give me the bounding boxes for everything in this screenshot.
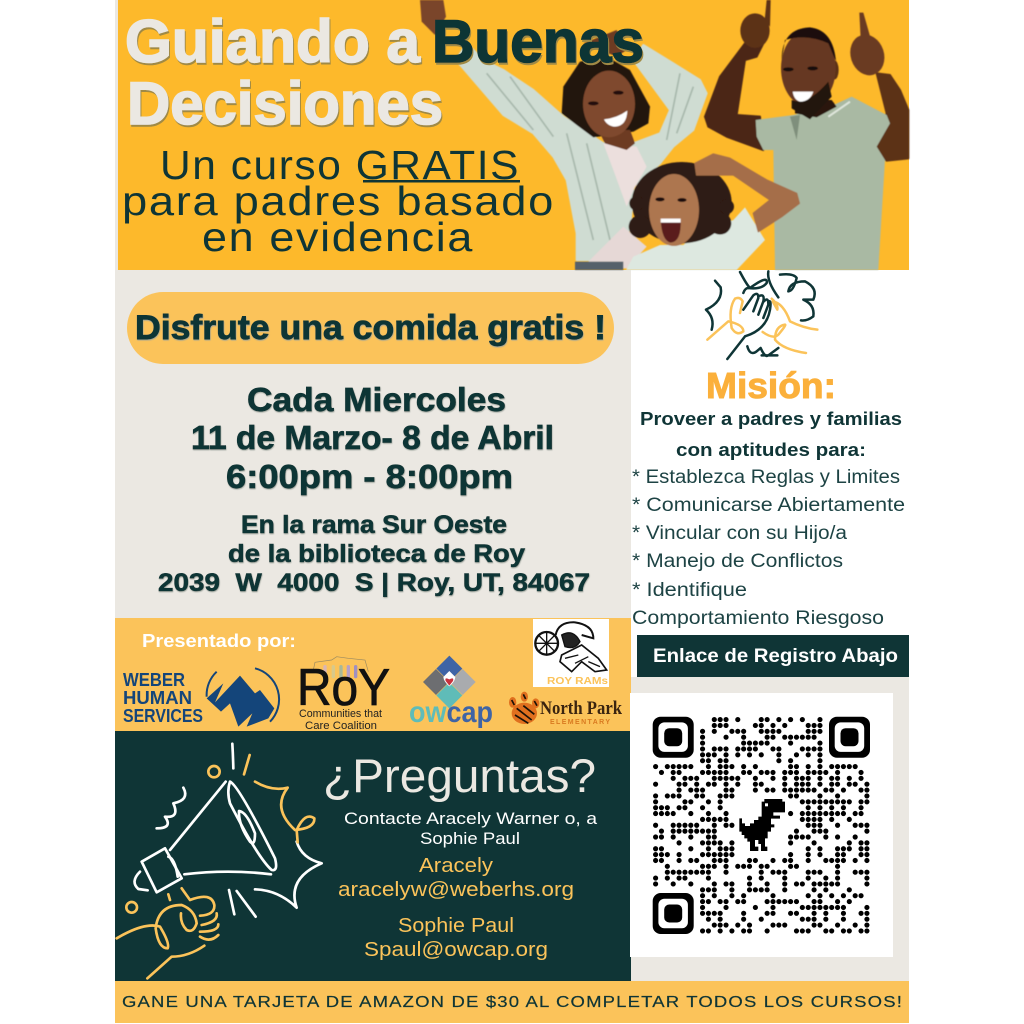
girl's raised arm (695, 154, 799, 232)
skills list: * Vincular con su Hijo/a (632, 523, 847, 544)
skills list (632, 467, 905, 629)
skills list: Comportamiento Riesgoso (632, 608, 884, 629)
text block: location: de la biblioteca de Roy (228, 540, 525, 568)
woman's raised hands (420, 0, 446, 35)
panel: mission (632, 271, 905, 629)
logo: Roy Communities that Care: RoY (297, 659, 390, 717)
logo: Roy Rams (533, 619, 609, 687)
banner: Amazon gift card: GANE UNA TARJETA DE AMAZON DE $30 AL COMPLETAR TODOS LOS CURSOS! (122, 994, 903, 1011)
text block: location: En la rama Sur Oeste (241, 511, 507, 539)
logo: Roy Communities that Care: Care Coalition (305, 720, 377, 732)
title: Guiando a (125, 8, 421, 75)
contact details: Aracely (419, 855, 493, 877)
icon: megaphone (117, 744, 322, 978)
icon: dinosaur (739, 799, 785, 851)
man's arms and hands (705, 40, 765, 150)
text block: location: 2039 W 4000 S | Roy, UT, 84067 (158, 569, 590, 597)
panel: event details background (115, 270, 631, 618)
icon: high five hands (706, 271, 817, 359)
heading: questions: ¿Preguntas? (323, 749, 596, 802)
man's shirt (756, 97, 890, 270)
QR data dots (656, 720, 867, 931)
banner: Amazon gift card (115, 981, 909, 1023)
logo: Weber Human Services (123, 668, 279, 727)
jeans (575, 262, 623, 270)
woman's top (603, 143, 647, 207)
logo: Roy Rams: ROY RAMs (547, 675, 608, 687)
photo: family celebrating (420, 0, 908, 270)
girl's curly hair (629, 162, 734, 243)
contact details (338, 855, 574, 961)
panel: header banner (115, 0, 909, 270)
heading: presented by: Presentado por: (142, 631, 296, 651)
QR finder patterns (653, 717, 870, 934)
contact details: Spaul@owcap.org (364, 939, 548, 961)
skills list: * Manejo de Conflictos (632, 551, 843, 572)
logo: Weber Human Services: SERVICES (123, 705, 203, 726)
text block: date and time: 11 de Marzo- 8 de Abril (191, 419, 554, 456)
logo: OWCAP: owcap (409, 696, 493, 729)
title (125, 8, 644, 137)
text block: date and time: Cada Miercoles (247, 381, 506, 418)
title: Buenas (432, 8, 644, 75)
heading: mission: Misión: (706, 365, 836, 406)
text block: date and time (191, 381, 554, 495)
logo: Roy Communities that Care: Communities that (299, 708, 382, 720)
logo: Weber Human Services: HUMAN (123, 687, 192, 708)
woman's cardigan (456, 43, 707, 260)
callout: free meal pill: Disfrute una comida gratis ! (135, 309, 606, 347)
woman's neck and face (598, 130, 635, 150)
callout: registration link: Enlace de Registro Abajo (653, 646, 898, 667)
contact details: Sophie Paul (398, 915, 514, 937)
mission statement (640, 408, 902, 460)
panel: questions (115, 731, 631, 981)
contact details: aracelyw@weberhs.org (338, 879, 574, 901)
mission statement: Proveer a padres y familias (640, 408, 902, 429)
logo: OWCAP (409, 656, 493, 729)
logo: North Park Elementary: North Park (540, 698, 622, 719)
mission statement: con aptitudes para: (676, 439, 866, 460)
logo: North Park Elementary (509, 692, 622, 726)
man's head (795, 100, 837, 117)
contact intro (344, 810, 598, 848)
subtitle: Un curso GRATIS (160, 142, 520, 188)
logo: North Park Elementary: ELEMENTARY (550, 719, 610, 726)
text block: date and time: 6:00pm - 8:00pm (226, 458, 513, 495)
callout: registration link (637, 635, 909, 677)
text block: location (158, 511, 590, 597)
skills list: * Establezca Reglas y Limites (632, 467, 900, 488)
panel: QR code (630, 677, 909, 981)
skills list: * Identifique (632, 580, 747, 601)
subtitle: en evidencia (202, 214, 474, 260)
callout: free meal pill (127, 292, 614, 364)
panel: sponsors (115, 618, 631, 732)
contact intro: Sophie Paul (420, 830, 520, 848)
subtitle: para padres basado (122, 178, 555, 224)
girl's shirt (626, 207, 765, 270)
woman's hair (562, 57, 650, 137)
subtitle (122, 142, 555, 260)
girl's face (649, 174, 699, 246)
skills list: * Comunicarse Abiertamente (632, 495, 905, 516)
title: Decisiones (127, 70, 443, 137)
contact intro: Contacte Aracely Warner o, a (344, 810, 598, 828)
logo: Weber Human Services: WEBER (123, 669, 185, 690)
